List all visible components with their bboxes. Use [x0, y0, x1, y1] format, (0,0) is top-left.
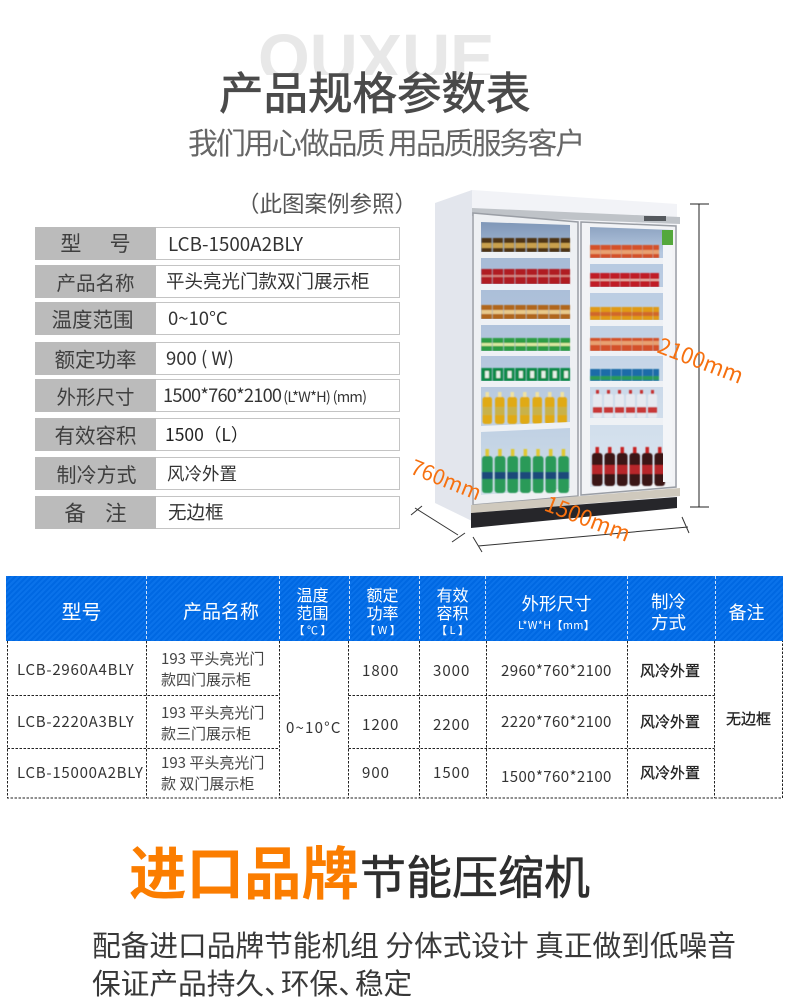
- header: temperature range: 温度: [296, 582, 328, 606]
- product name: [161, 752, 264, 794]
- spec row: remarks: 备 注: [64, 497, 127, 528]
- model code: LCB-15000A2BLY: [17, 762, 144, 783]
- spec row: power: [35, 342, 400, 375]
- header: rated power: 功率: [366, 600, 398, 624]
- power: 1200: [362, 714, 399, 735]
- dimension arrow: width: [473, 517, 689, 552]
- illustration: two door display fridge: [406, 190, 749, 552]
- image caption: （此图案例参照）: [237, 187, 417, 219]
- volume: 2200: [433, 714, 470, 735]
- dimension label: depth: 760mm: [406, 452, 486, 507]
- header: rated power: 额定: [366, 582, 398, 606]
- dimensions: 2220*760*2100: [501, 711, 612, 732]
- row 2: three door model: [17, 702, 700, 744]
- header: volume: [436, 582, 469, 638]
- cooling: 风冷外置: [640, 711, 700, 732]
- spec row: remarks: 无边框: [168, 499, 224, 525]
- spec row: power: 额定功率: [54, 343, 136, 373]
- spec row: product name: 平头亮光门款双门展示柜: [166, 268, 370, 294]
- panel: model comparison table: [6, 576, 783, 798]
- header: cooling method: 方式: [651, 610, 686, 635]
- spec row: temperature: [35, 302, 400, 335]
- spec row: model: [35, 227, 400, 260]
- product name: 193 平头亮光门: [161, 702, 264, 723]
- spec row: cooling: 风冷外置: [167, 461, 237, 486]
- spec row: dimensions: 外形尺寸: [56, 381, 134, 410]
- spec row: power: 900 ( W): [166, 345, 234, 371]
- merged cell: remarks: 无边框: [726, 708, 771, 729]
- fridge: [435, 190, 680, 528]
- spec row: model: 型 号: [60, 228, 131, 258]
- spec row: temperature: 温度范围: [52, 303, 134, 333]
- spec row: product name: 产品名称: [56, 267, 134, 296]
- header: volume: 【 L 】: [436, 622, 469, 638]
- panel: specification list: [35, 227, 400, 529]
- product name: 193 平头亮光门: [161, 648, 264, 669]
- spec row: volume: 1500（L）: [165, 422, 248, 447]
- table header band: [6, 576, 783, 641]
- product name: [161, 702, 264, 744]
- dimension label: width: 1500mm: [540, 487, 636, 549]
- heading highlight: 进口品牌: [129, 827, 359, 911]
- body text: 配备进口品牌节能机组 分体式设计 真正做到低噪音: [92, 924, 736, 965]
- shelf products: right door: [590, 245, 666, 486]
- row 1: four door model: [17, 648, 700, 690]
- spec row: volume: 有效容积: [54, 419, 136, 449]
- dimension label: height: 2100mm: [653, 329, 749, 391]
- volume: 1500: [433, 762, 470, 783]
- header: rated power: [364, 582, 401, 638]
- dimension arrow: depth: [411, 506, 465, 542]
- spec row: volume: [35, 418, 400, 451]
- product name: 193 平头亮光门: [161, 752, 264, 773]
- spec row: cooling: 制冷方式: [56, 459, 136, 488]
- power: 1800: [362, 660, 399, 681]
- spec row: remarks: [35, 496, 400, 529]
- header: rated power: 【 W 】: [364, 622, 401, 638]
- subtitle: 我们用心做品质 用品质服务客户: [188, 119, 583, 163]
- cooling: 风冷外置: [640, 660, 700, 681]
- header: temperature range: [294, 582, 331, 638]
- spec row: cooling: [35, 457, 400, 490]
- title: 产品规格参数表: [219, 57, 531, 122]
- header: model: 型号: [62, 596, 102, 625]
- spec row: model: LCB-1500A2BLY: [168, 230, 303, 257]
- body text: [92, 924, 736, 1001]
- dimension arrow: height: [690, 204, 709, 507]
- header: dimensions: [518, 591, 595, 632]
- spec row: product name: [35, 265, 400, 298]
- header: dimensions: L*W*H【mm】: [518, 616, 595, 632]
- model code: LCB-2960A4BLY: [17, 659, 135, 680]
- spec row: dimensions: 1500*760*2100(L*W*H) (mm): [163, 382, 366, 408]
- cooling: 风冷外置: [640, 762, 700, 783]
- model code: LCB-2220A3BLY: [17, 711, 135, 732]
- heading remainder: 节能压缩机: [360, 842, 590, 908]
- dimensions: 1500*760*2100: [501, 766, 612, 787]
- volume: 3000: [433, 660, 470, 681]
- heading: imported brand compressor: [129, 827, 590, 911]
- header: product name: 产品名称: [183, 597, 259, 624]
- header: dimensions: 外形尺寸: [522, 591, 592, 616]
- product name: 款三门展示柜: [161, 723, 251, 744]
- header: cooling method: [651, 589, 686, 635]
- header: temperature range: 【 ℃ 】: [294, 622, 331, 638]
- dimensions: 2960*760*2100: [501, 660, 612, 681]
- shelf products: left door: [481, 238, 570, 493]
- header: remarks: 备注: [728, 599, 764, 625]
- header: volume: 容积: [436, 600, 468, 624]
- header: cooling method: 制冷: [651, 589, 686, 614]
- shelves: [481, 252, 663, 432]
- product name: 款 双门展示柜: [161, 773, 254, 794]
- merged cell: temperature: 0~10°C: [286, 717, 342, 738]
- spec row: temperature: 0~10°C: [168, 305, 228, 331]
- product name: [161, 648, 264, 690]
- table grid lines: [7, 576, 783, 798]
- spec row: dimensions: [35, 379, 400, 412]
- row 3: two door model: [17, 752, 700, 794]
- header: volume: 有效: [436, 582, 468, 606]
- header: temperature range: 范围: [296, 600, 328, 624]
- product name: 款四门展示柜: [161, 669, 251, 690]
- power: 900: [362, 762, 390, 783]
